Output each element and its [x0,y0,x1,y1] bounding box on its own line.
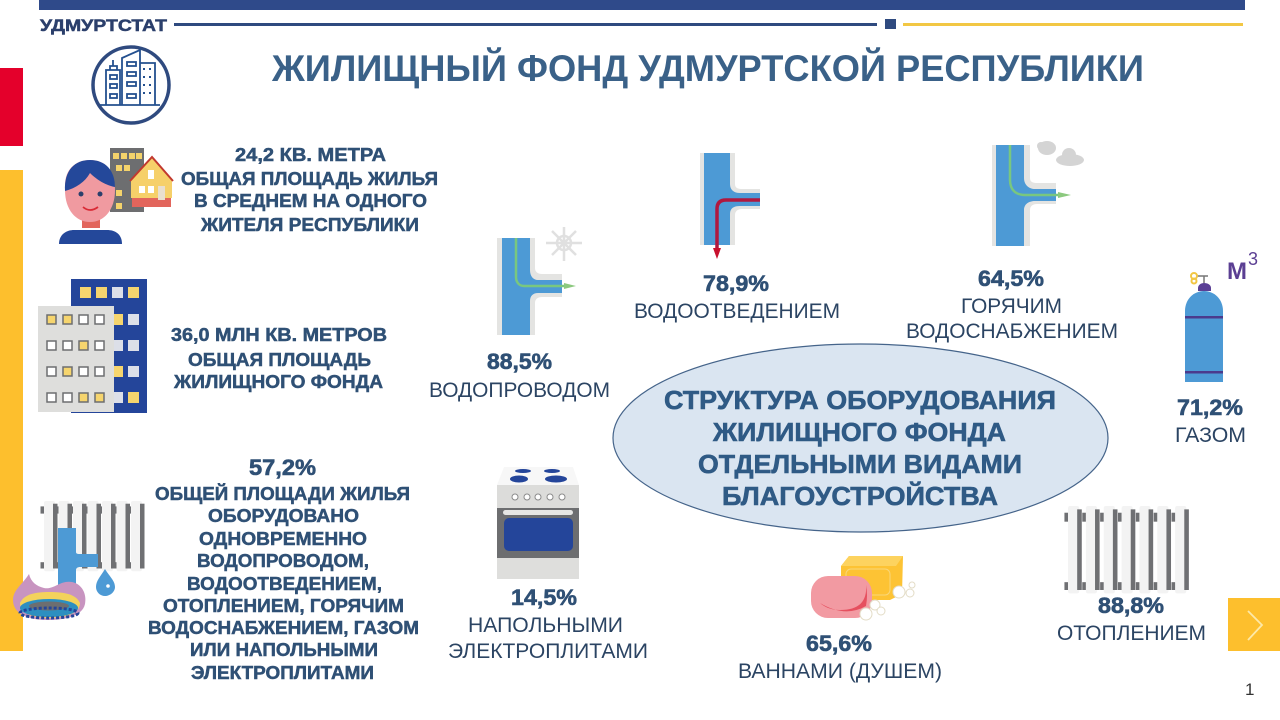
text block: living area per resident: ОБЩАЯ ПЛОЩАДЬ ЖИЛЬЯ [181,169,438,189]
central ellipse callout: СТРУКТУРА ОБОРУДОВАНИЯ [664,385,1056,415]
text block: fully equipped area: ОБЩЕЙ ПЛОЩАДИ ЖИЛЬЯ [155,483,410,504]
label: electric stoves [448,585,648,663]
icon: cold water pipe [497,227,582,335]
icon: apartment blocks [38,279,147,413]
label: hot water: ВОДОСНАБЖЕНИЕМ [906,320,1118,343]
icon: soap [811,556,915,620]
label: water supply: 88,5% [487,349,552,374]
text block: total housing stock: ОБЩАЯ ПЛОЩАДЬ [188,350,371,370]
side accent: red [0,68,23,146]
icon: gas cylinder: 3 [1248,249,1258,269]
text block: fully equipped area: ОДНОВРЕМЕННО [199,529,367,549]
icon: hot water pipe [992,141,1084,246]
text block: fully equipped area: ВОДООТВЕДЕНИЕМ, [187,574,382,594]
next slide button [1228,598,1280,651]
text block: fully equipped area: ВОДОПРОВОДОМ, [197,551,369,571]
central ellipse callout: ОТДЕЛЬНЫМИ ВИДАМИ [698,449,1022,479]
label: baths: ВАННАМИ (ДУШЕМ) [738,660,942,683]
label: hot water [906,266,1118,343]
label: gas [1175,395,1246,447]
label: water supply [429,349,610,402]
text block: fully equipped area: ИЛИ НАПОЛЬНЫМИ [190,640,378,660]
label: sewerage: ВОДООТВЕДЕНИЕМ [634,300,840,323]
text block: fully equipped area [148,455,419,683]
text block: living area per resident [181,145,438,235]
organisation name: УДМУРТСТАТ [40,16,168,35]
text block: fully equipped area: 57,2% [249,455,316,480]
label: sewerage: 78,9% [703,271,769,296]
label: hot water: ГОРЯЧИМ [961,295,1062,318]
label: heating: 88,8% [1098,593,1164,618]
label: heating [1057,593,1206,645]
icon: radiator [1064,506,1189,593]
icon: sewerage pipe [700,153,760,259]
title: ЖИЛИЩНЫЙ ФОНД УДМУРТСКОЙ РЕСПУБЛИКИ [271,47,1144,89]
label: heating: ОТОПЛЕНИЕМ [1057,622,1206,645]
label: baths: 65,6% [806,631,872,656]
label: sewerage [634,271,840,323]
central ellipse callout: ЖИЛИЩНОГО ФОНДА [712,417,1006,447]
central ellipse callout [613,344,1108,532]
label: electric stoves: 14,5% [511,585,577,610]
text block: total housing stock: ЖИЛИЩНОГО ФОНДА [173,372,383,392]
text block: fully equipped area: ЭЛЕКТРОПЛИТАМИ [191,663,374,683]
icon: buildings logo [93,47,169,123]
central ellipse callout: БЛАГОУСТРОЙСТВА [722,481,998,511]
icon: radiator, tap and burner [13,501,144,620]
icon: person with houses [59,148,173,244]
label: electric stoves: ЭЛЕКТРОПЛИТАМИ [448,640,648,663]
text block: fully equipped area: ВОДОСНАБЖЕНИЕМ, ГАЗОМ [148,618,419,638]
label: electric stoves: НАПОЛЬНЫМИ [468,614,623,637]
top bar [39,0,1245,10]
text block: fully equipped area: ОБОРУДОВАНО [208,506,359,526]
text block: total housing stock [171,325,387,392]
side accent: yellow [0,170,23,651]
text block: living area per resident: В СРЕДНЕМ НА ОДНОГО [194,191,427,211]
icon: gas cylinder [1185,249,1258,382]
label: hot water: 64,5% [978,266,1044,291]
text block: living area per resident: 24,2 КВ. МЕТРА [235,145,386,165]
text block: fully equipped area: ОТОПЛЕНИЕМ, ГОРЯЧИМ [163,596,404,616]
label: gas: 71,2% [1177,395,1243,420]
text block: living area per resident: ЖИТЕЛЯ РЕСПУБЛИКИ [200,215,419,235]
icon: gas cylinder: М [1227,258,1247,285]
text block: total housing stock: 36,0 МЛН КВ. МЕТРОВ [171,325,387,345]
page number: 1 [1245,680,1254,699]
icon: electric stove [497,467,579,579]
label: water supply: ВОДОПРОВОДОМ [429,379,610,402]
header rule [174,19,1243,29]
label: gas: ГАЗОМ [1175,424,1246,447]
label: baths [738,631,942,683]
